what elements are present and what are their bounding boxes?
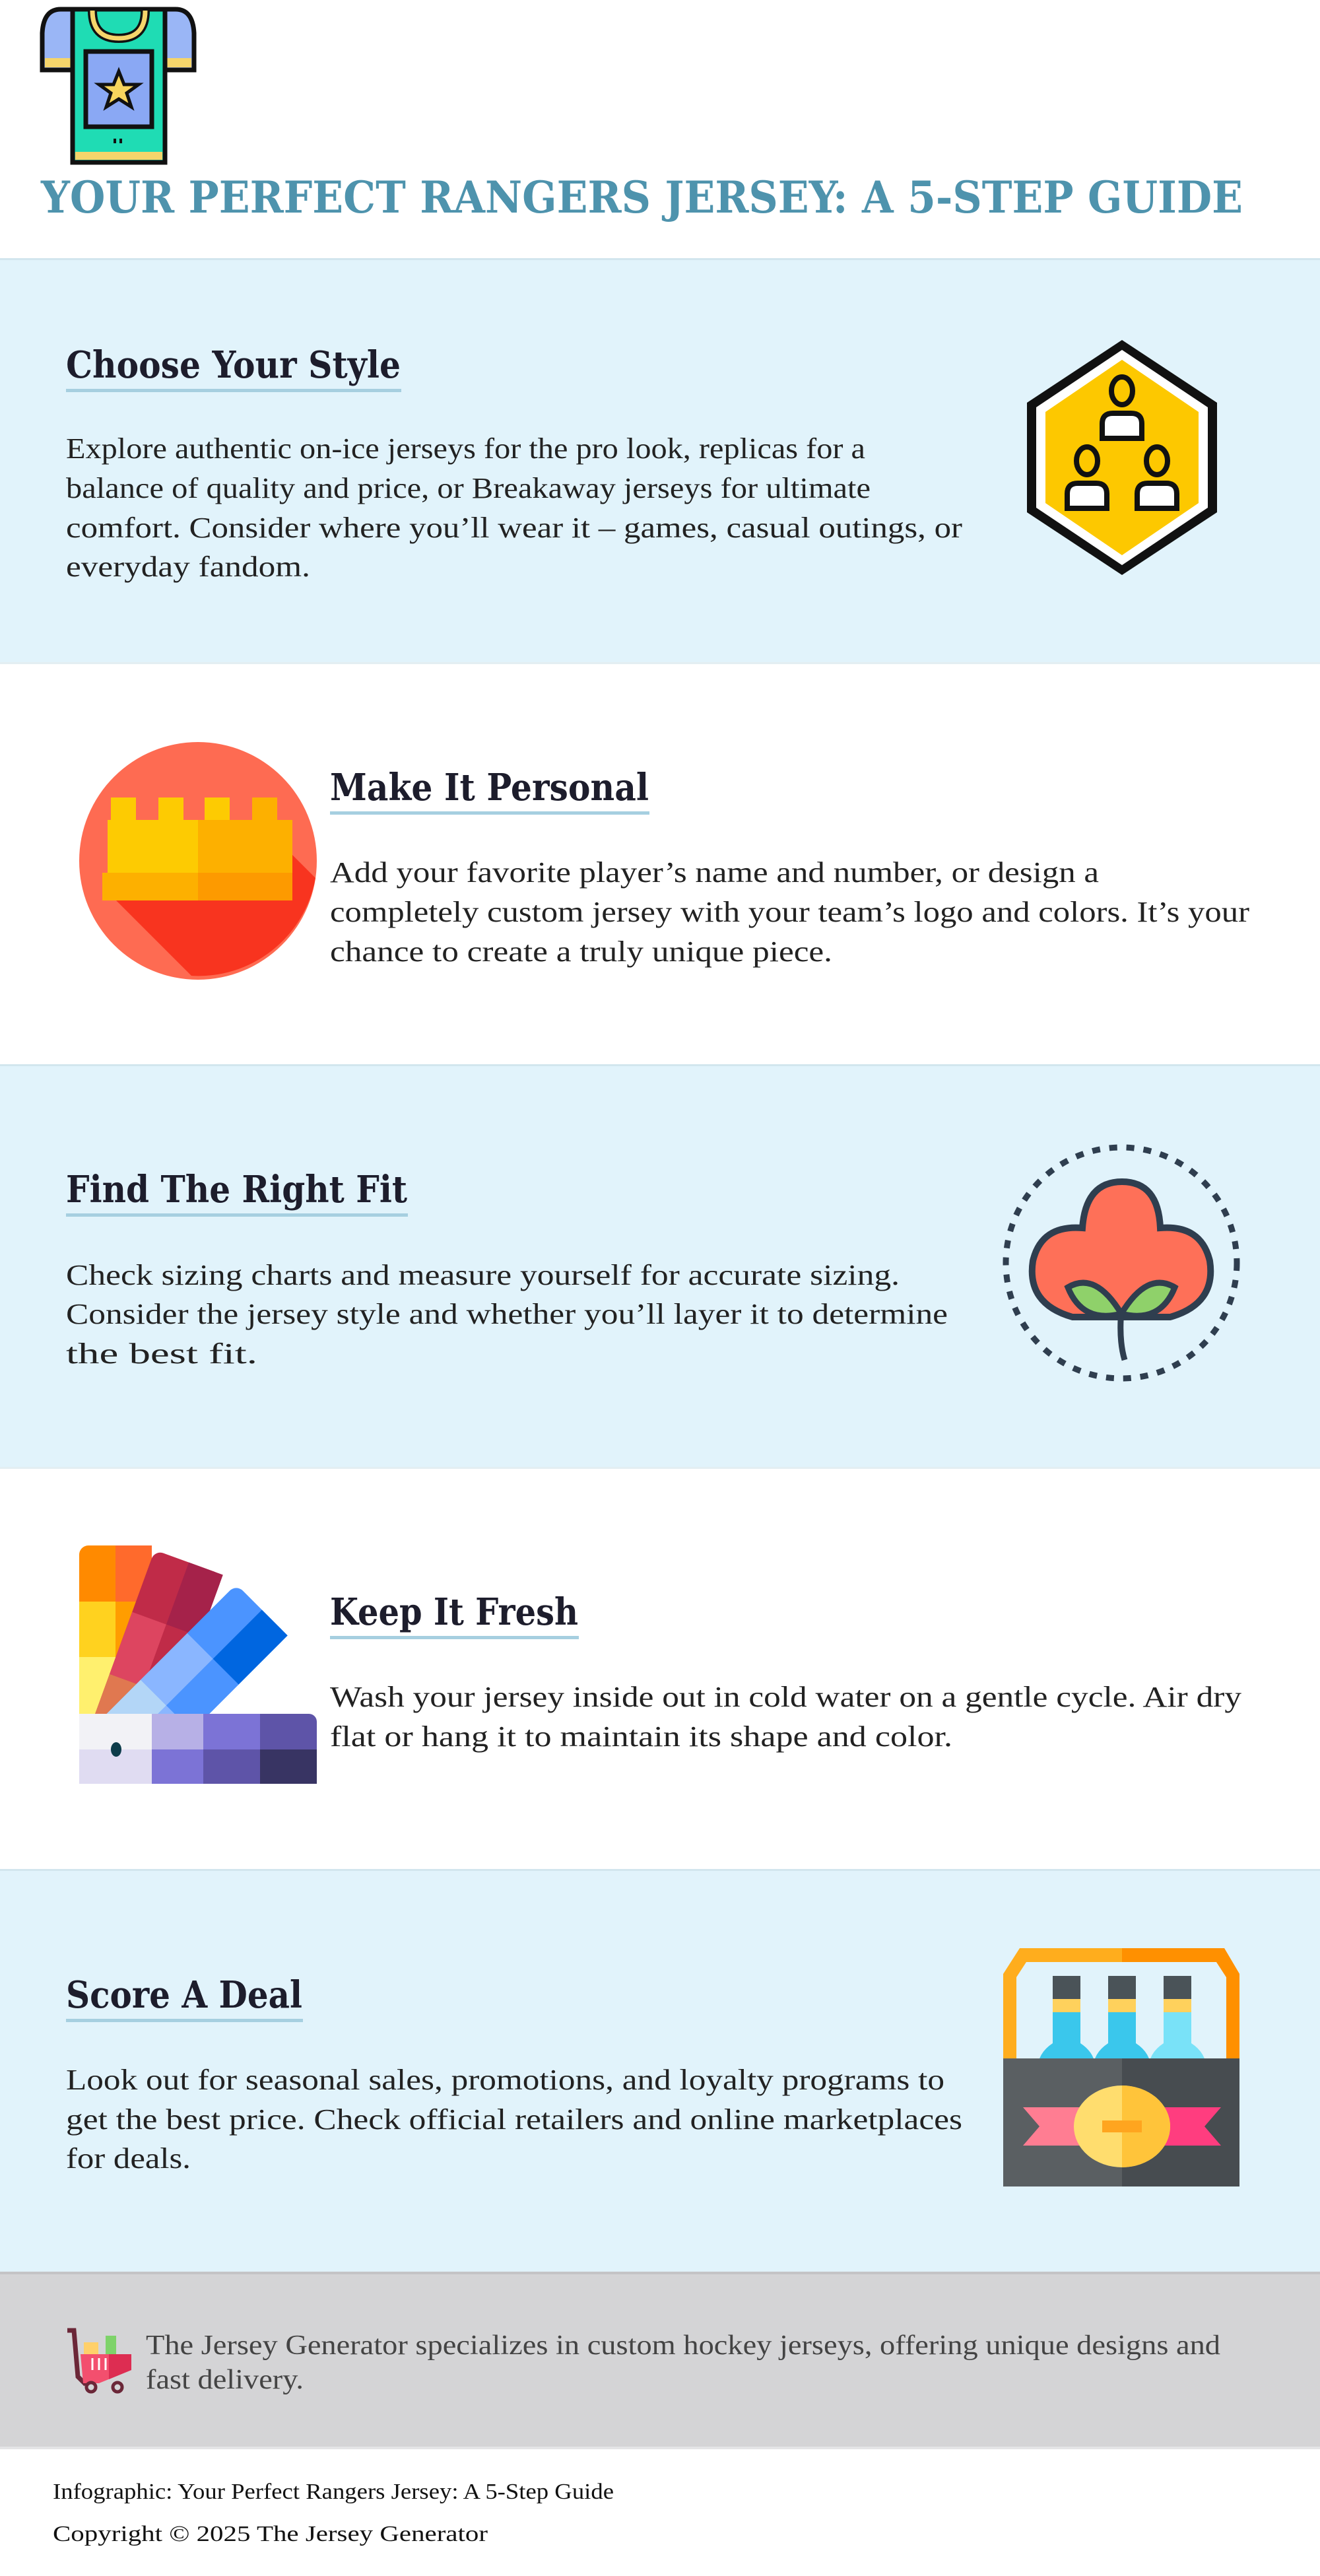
text block: company description bbox=[146, 2330, 1220, 2395]
text block: make it personal: chance to create a truly unique piece. bbox=[330, 935, 832, 968]
text block: make it personal: Add your favorite player’s name and number, or design a bbox=[330, 856, 1099, 889]
text block: score a deal: Look out for seasonal sales, promotions, and loyalty programs to bbox=[66, 2064, 944, 2096]
panel: choose your style bbox=[0, 258, 1320, 662]
text block: choose your style: Explore authentic on-ice jerseys for the pro look, replicas for a bbox=[66, 432, 865, 465]
text block: choose your style bbox=[66, 432, 962, 583]
icon: red circle with blocks bbox=[79, 742, 317, 980]
panel: score a deal bbox=[0, 1869, 1320, 2272]
text block: company description: The Jersey Generator specializes in custom hockey jerseys, offering unique designs and bbox=[146, 2330, 1220, 2361]
heading: make it personal: Make It Personal bbox=[330, 766, 649, 809]
panel: make it personal bbox=[0, 662, 1320, 1064]
text block: company description: fast delivery. bbox=[146, 2365, 304, 2395]
icon: hexagon people bbox=[1027, 340, 1217, 575]
text block: find the right fit: Check sizing charts and measure yourself for accurate sizing. bbox=[66, 1259, 900, 1291]
title: YOUR PERFECT RANGERS JERSEY: A 5-STEP GUIDE bbox=[40, 172, 1243, 223]
icon: jersey bbox=[42, 9, 194, 162]
text block: keep it fresh: flat or hang it to maintain its shape and color. bbox=[330, 1720, 952, 1753]
panel: keep it fresh bbox=[0, 1467, 1320, 1869]
text block: find the right fit bbox=[66, 1259, 948, 1370]
text block: make it personal: completely custom jersey with your team’s logo and colors. It’s your bbox=[330, 896, 1249, 928]
heading: score a deal: Score A Deal bbox=[66, 1973, 302, 2017]
text block: keep it fresh bbox=[330, 1681, 1241, 1753]
text block: choose your style: comfort. Consider where you’ll wear it – games, casual outings, or bbox=[66, 512, 962, 544]
text block: choose your style: everyday fandom. bbox=[66, 551, 310, 583]
icon: shopping cart bbox=[67, 2330, 131, 2392]
credits: Infographic: Your Perfect Rangers Jersey: A 5-Step Guide bbox=[53, 2480, 614, 2504]
text block: make it personal bbox=[330, 856, 1249, 968]
text block: score a deal bbox=[66, 2064, 962, 2175]
heading: choose your style: Choose Your Style bbox=[66, 343, 401, 387]
heading: keep it fresh: Keep It Fresh bbox=[330, 1590, 578, 1634]
panel: find the right fit bbox=[0, 1064, 1320, 1467]
text block: find the right fit: Consider the jersey style and whether you’ll layer it to determine bbox=[66, 1298, 948, 1330]
icon: cotton flower bbox=[1006, 1147, 1237, 1378]
text block: find the right fit: the best fit. bbox=[66, 1338, 257, 1370]
icon: bottle crate bbox=[1003, 1948, 1239, 2186]
credits: Copyright © 2025 The Jersey Generator bbox=[53, 2522, 488, 2546]
icon: color palette bbox=[79, 1545, 317, 1784]
credits bbox=[53, 2480, 614, 2546]
heading: find the right fit: Find The Right Fit bbox=[66, 1168, 407, 1211]
text block: score a deal: for deals. bbox=[66, 2142, 191, 2175]
text block: score a deal: get the best price. Check official retailers and online marketplaces bbox=[66, 2103, 962, 2136]
text block: keep it fresh: Wash your jersey inside out in cold water on a gentle cycle. Air dry bbox=[330, 1681, 1241, 1713]
panel: company footer bbox=[0, 2272, 1320, 2449]
text block: choose your style: balance of quality and price, or Breakaway jerseys for ultimate bbox=[66, 472, 871, 504]
